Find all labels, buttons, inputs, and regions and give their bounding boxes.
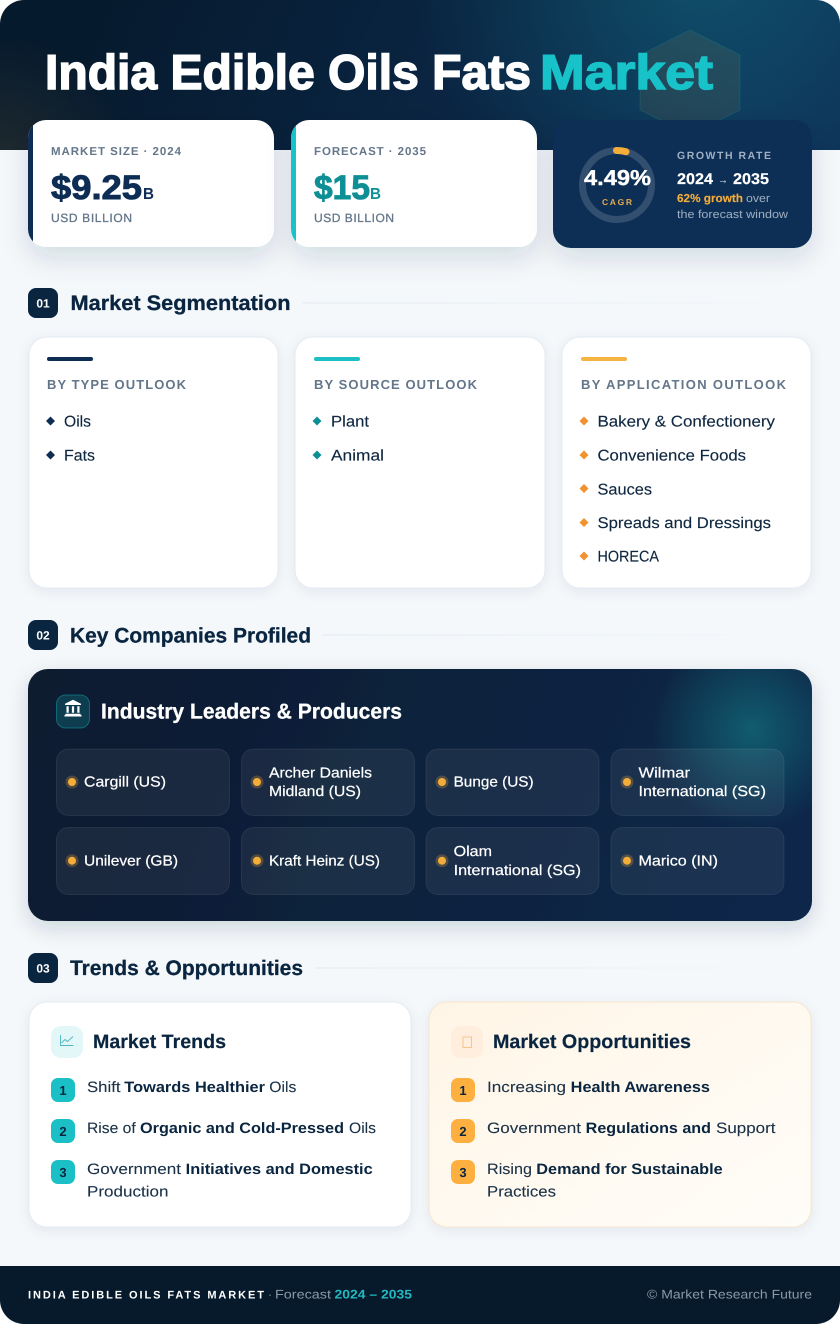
growth text: → [718, 171, 728, 187]
stat card: forecast 2035 [291, 120, 537, 247]
icon: bank building [56, 695, 90, 728]
company: Archer Daniels Midland: Midland (US) [269, 784, 361, 800]
company: Marico [611, 828, 784, 894]
panel: by source outlook: Animal [331, 448, 384, 465]
section heading: trends and opportunities [28, 953, 812, 983]
company: Archer Daniels Midland: Archer Daniels [269, 766, 372, 782]
section heading: key companies: Key Companies Profiled [70, 625, 311, 648]
panel: by application outlook: Sauces [598, 481, 652, 498]
opportunity 3: Demand for Sustainable [536, 1161, 723, 1178]
trend 3 [51, 1160, 373, 1200]
company: Wilmar International: Wilmar [638, 766, 690, 782]
stat card: market size 2024: B [143, 186, 154, 203]
trend 1: Towards Healthier [124, 1079, 265, 1096]
section heading: market segmentation: 01 [36, 296, 50, 310]
opportunity 1: Health Awareness [571, 1079, 710, 1096]
panel: by source outlook: BY SOURCE OUTLOOK [314, 377, 478, 392]
trend 3: Initiatives and Domestic [186, 1161, 373, 1178]
panel: market opportunities [429, 1002, 811, 1227]
company: Marico: Marico (IN) [638, 854, 718, 870]
opportunity 2: Government [487, 1120, 582, 1137]
decorative hexagon [640, 30, 740, 120]
icon: placeholder box [451, 1026, 483, 1058]
stat card: market size 2024: $9.25 [51, 169, 142, 207]
footer: Forecast [275, 1288, 332, 1302]
section heading: market segmentation: Market Segmentation [70, 292, 290, 315]
company: Wilmar International [611, 749, 784, 816]
opportunity 2 [451, 1119, 776, 1143]
panel: by application outlook: Convenience Foods [598, 448, 746, 465]
title: Market [540, 46, 713, 100]
panel: by type outlook: Fats [64, 448, 95, 465]
growth text: 2035 [733, 171, 769, 188]
company: Unilever: Unilever (GB) [84, 854, 178, 870]
opportunity 2: Support [716, 1120, 776, 1137]
opportunity 3 [451, 1160, 723, 1200]
stat card: forecast 2035: USD BILLION [314, 211, 394, 225]
stat card: market size 2024: USD BILLION [51, 211, 132, 225]
growth text: 2024 [677, 171, 713, 188]
panel: market trends [29, 1002, 411, 1227]
section heading: trends and opportunities: 03 [36, 962, 50, 976]
trend 1: Shift [87, 1079, 121, 1096]
panel heading: Market Opportunities [493, 1031, 691, 1053]
panel: by application outlook: BY APPLICATION OUTLOOK [581, 377, 787, 392]
panel: by application outlook: Spreads and Dressings [598, 515, 771, 532]
panel: by type outlook: Oils [64, 414, 91, 431]
section heading: market segmentation [28, 288, 812, 318]
panel heading: Market Trends [93, 1031, 226, 1053]
panel: by application outlook [562, 337, 811, 588]
stat card: forecast 2035: FORECAST · 2035 [314, 146, 427, 158]
footer [0, 1266, 840, 1324]
title: India Edible Oils Fats [45, 46, 531, 100]
company: Bunge: Bunge (US) [454, 775, 534, 791]
company: Olam International: Olam [454, 844, 492, 860]
company: Kraft Heinz: Kraft Heinz (US) [269, 854, 380, 870]
panel: by source outlook: Plant [331, 414, 370, 431]
trend 3: Production [87, 1184, 168, 1200]
opportunity 2: 2 [459, 1124, 467, 1139]
opportunity 3: Rising [487, 1161, 532, 1178]
footer: · [268, 1288, 272, 1302]
section heading: trends and opportunities: Trends & Opportunities [70, 957, 303, 980]
growth text: the forecast window [677, 209, 789, 221]
panel: by source outlook [295, 337, 545, 588]
trend 2: 2 [59, 1124, 67, 1139]
company: Archer Daniels Midland [242, 749, 414, 816]
section heading: key companies [28, 620, 812, 650]
trend 1: 1 [59, 1083, 67, 1098]
panel heading: Industry Leaders & Producers [101, 700, 402, 724]
growth text: GROWTH RATE [677, 150, 771, 162]
trend 1 [51, 1078, 296, 1102]
company: Olam International: International (SG) [454, 863, 581, 879]
CAGR ring: CAGR [602, 197, 632, 207]
stat card: market size 2024 [28, 120, 274, 247]
company: Wilmar International: International (SG) [638, 784, 766, 800]
growth text: 62% growth [677, 193, 743, 205]
footer: 2024 – 2035 [334, 1288, 412, 1302]
icon: line chart [51, 1026, 83, 1058]
trend 2 [51, 1119, 376, 1143]
section heading: key companies: 02 [36, 628, 50, 642]
CAGR ring [582, 150, 652, 220]
footer: INDIA EDIBLE OILS FATS MARKET [28, 1290, 264, 1302]
trend 2: Oils [349, 1120, 376, 1137]
panel: industry leaders and producers [28, 669, 812, 921]
trend 3: 3 [59, 1165, 67, 1180]
panel: by type outlook: BY TYPE OUTLOOK [47, 377, 187, 392]
stat card: forecast 2035: $15 [314, 169, 370, 207]
trend 3: Government [87, 1161, 182, 1178]
opportunity 3: Practices [487, 1184, 556, 1200]
company: Cargill: Cargill (US) [84, 775, 166, 791]
stat card: forecast 2035: B [370, 186, 381, 203]
growth text: over [746, 193, 770, 205]
opportunity 1 [451, 1078, 710, 1102]
opportunity 1: 1 [459, 1083, 467, 1098]
panel: by application outlook: HORECA [598, 549, 660, 566]
stat card: market size 2024: MARKET SIZE · 2024 [51, 146, 182, 158]
company: Olam International [426, 828, 599, 894]
trend 2: Organic and Cold-Pressed [140, 1120, 344, 1137]
company: Cargill [56, 749, 230, 816]
opportunity 2: Regulations and [586, 1120, 711, 1137]
opportunity 3: 3 [459, 1165, 467, 1180]
company: Kraft Heinz [242, 828, 414, 894]
panel: by application outlook: Bakery & Confectionery [598, 414, 775, 431]
stat card: CAGR growth rate [553, 120, 812, 248]
panel: by type outlook [29, 337, 278, 588]
trend 1: Oils [269, 1079, 296, 1096]
CAGR ring: 4.49% [584, 166, 651, 190]
opportunity 1: Increasing [487, 1079, 566, 1096]
company: Unilever [56, 828, 230, 894]
header banner [0, 0, 840, 150]
growth text [677, 150, 789, 221]
trend 2: Rise of [87, 1120, 137, 1137]
company: Bunge [426, 749, 599, 816]
footer: © Market Research Future [647, 1288, 812, 1302]
